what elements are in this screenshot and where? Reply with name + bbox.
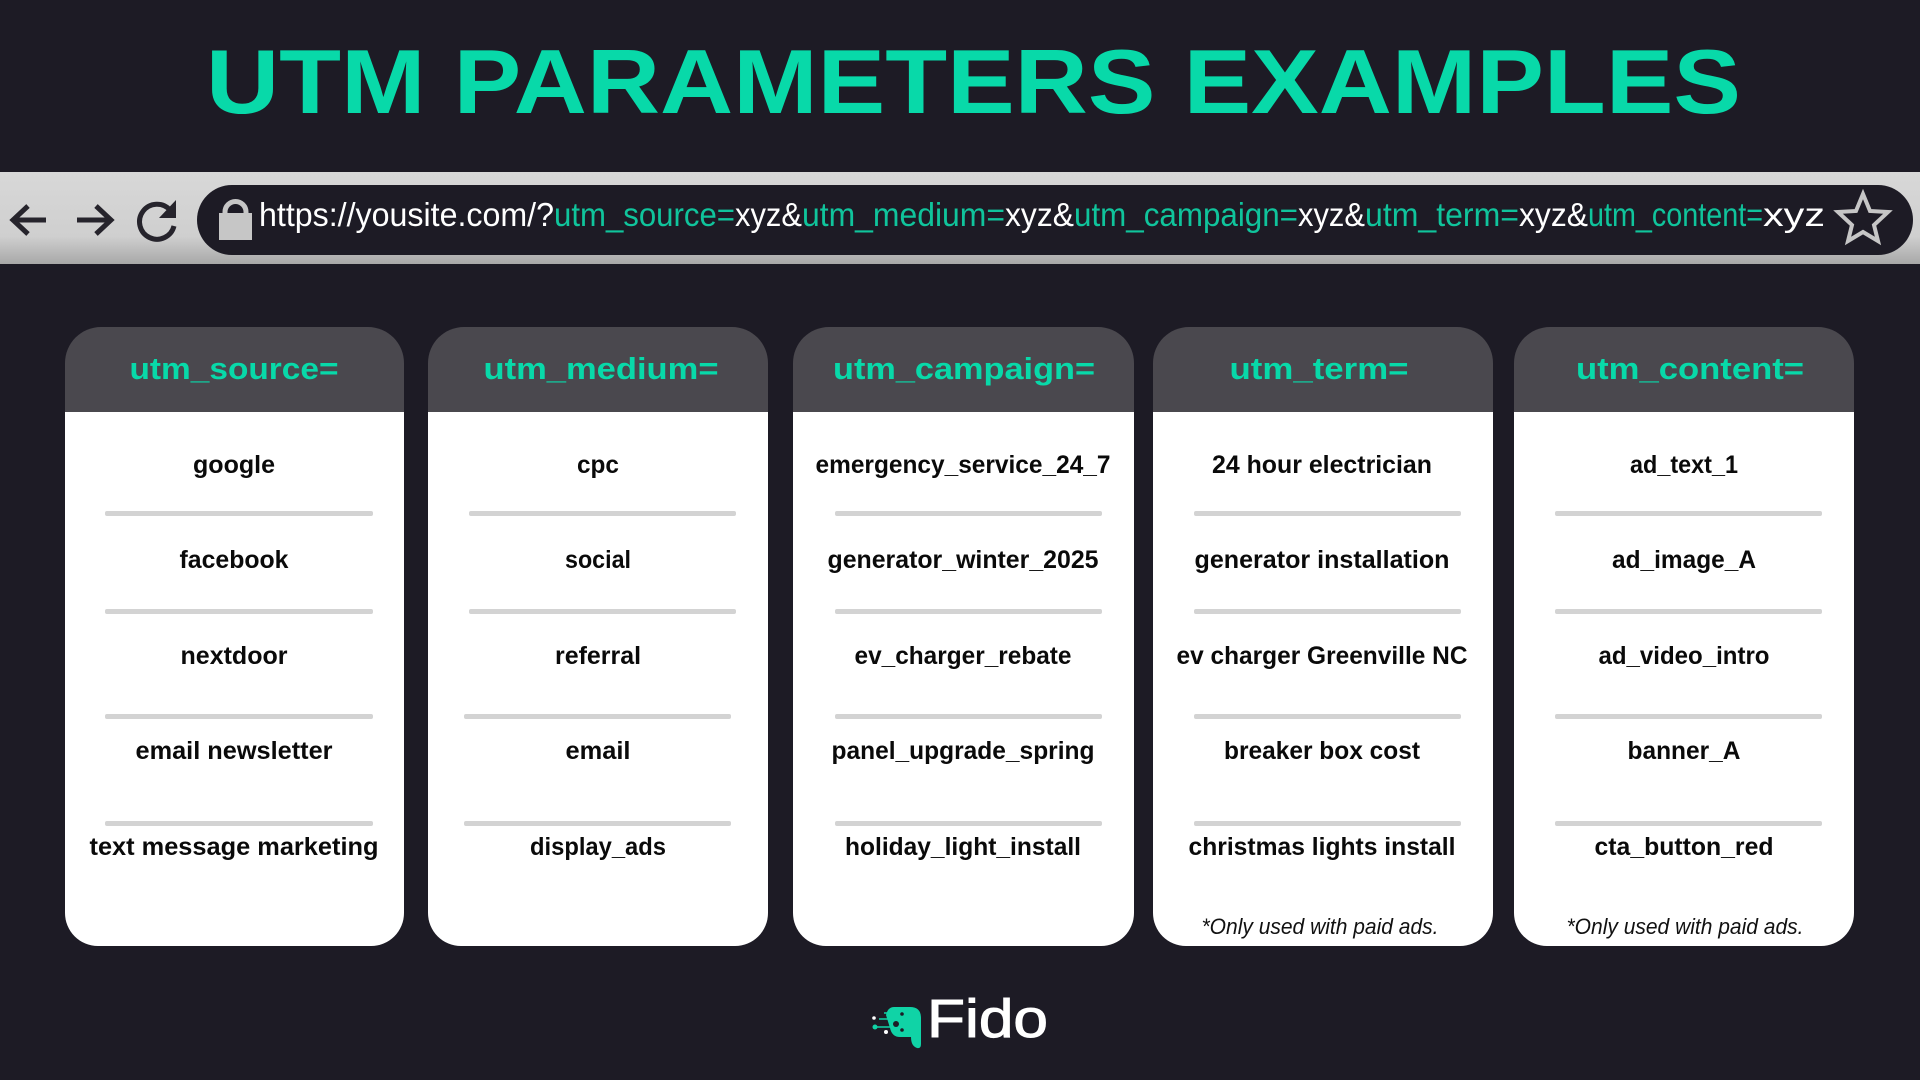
icon: logo mark — [872, 1007, 921, 1048]
column header — [428, 327, 768, 412]
logo wordmark: Fido — [927, 989, 1048, 1049]
URL text: xyz — [1763, 196, 1825, 233]
values: generator installation — [1194, 546, 1450, 574]
Fido logo — [872, 989, 1048, 1049]
values: nextdoor — [180, 642, 288, 670]
values: emergency_service_24_7 — [816, 451, 1110, 479]
values: email newsletter — [136, 737, 333, 765]
column header — [793, 327, 1134, 412]
values: breaker box cost — [1224, 737, 1421, 765]
values: google — [193, 451, 275, 479]
values: ad_video_intro — [1598, 642, 1770, 670]
values: christmas lights install — [1188, 833, 1456, 861]
panel: utm_source — [65, 327, 404, 946]
title: UTM PARAMETERS EXAMPLES — [206, 32, 1741, 133]
URL text: utm_term= — [1365, 196, 1519, 233]
values: ev charger Greenville NC — [1176, 642, 1468, 670]
panel: utm_medium — [428, 327, 768, 946]
URL text: xyz& — [735, 196, 802, 233]
values: ad_image_A — [1612, 546, 1756, 574]
values: cta_button_red — [1594, 833, 1774, 861]
values: email — [566, 737, 630, 765]
values: generator_winter_2025 — [828, 546, 1099, 574]
URL text: utm_medium= — [802, 196, 1005, 233]
column header — [1153, 327, 1493, 412]
values — [90, 451, 378, 861]
values: panel_upgrade_spring — [832, 737, 1094, 765]
footnote: *Only used with paid ads. — [1202, 914, 1438, 939]
icon: back arrow — [13, 206, 46, 234]
panel: utm_content — [1514, 327, 1854, 946]
icon: star — [1838, 194, 1888, 241]
values — [1176, 451, 1468, 861]
URL text: xyz& — [1298, 196, 1365, 233]
column header: utm_campaign= — [833, 351, 1095, 386]
column header: utm_source= — [130, 351, 338, 386]
column header: utm_term= — [1230, 351, 1408, 386]
panel: utm_campaign — [793, 327, 1134, 946]
URL text — [259, 196, 1825, 233]
URL text: xyz& — [1519, 196, 1588, 233]
values: facebook — [180, 546, 289, 574]
values: cpc — [577, 451, 619, 479]
values — [816, 451, 1110, 861]
values: 24 hour electrician — [1212, 451, 1432, 479]
panel: utm_term — [1153, 327, 1493, 946]
icon: reload — [140, 200, 176, 239]
values: banner_A — [1628, 737, 1740, 765]
footnote: *Only used with paid ads. — [1566, 914, 1804, 939]
browser address bar — [0, 172, 1920, 264]
column header — [1514, 327, 1854, 412]
URL text: xyz& — [1005, 196, 1074, 233]
values: social — [565, 546, 631, 574]
address pill — [197, 185, 1913, 255]
values — [530, 451, 666, 861]
values — [1594, 451, 1774, 861]
URL text: utm_content= — [1588, 196, 1763, 233]
column header: utm_medium= — [484, 351, 718, 386]
icon: padlock — [219, 202, 252, 240]
values: text message marketing — [90, 833, 378, 861]
URL text: utm_source= — [554, 196, 735, 233]
values: display_ads — [530, 833, 666, 861]
icon: forward arrow — [77, 206, 111, 234]
values: ad_text_1 — [1630, 451, 1738, 479]
column header: utm_content= — [1576, 351, 1804, 386]
values: holiday_light_install — [845, 833, 1081, 861]
values: ev_charger_rebate — [854, 642, 1072, 670]
column header — [65, 327, 404, 412]
values: referral — [555, 642, 641, 670]
URL text: https://yousite.com/? — [259, 196, 554, 233]
URL text: utm_campaign= — [1074, 196, 1298, 233]
